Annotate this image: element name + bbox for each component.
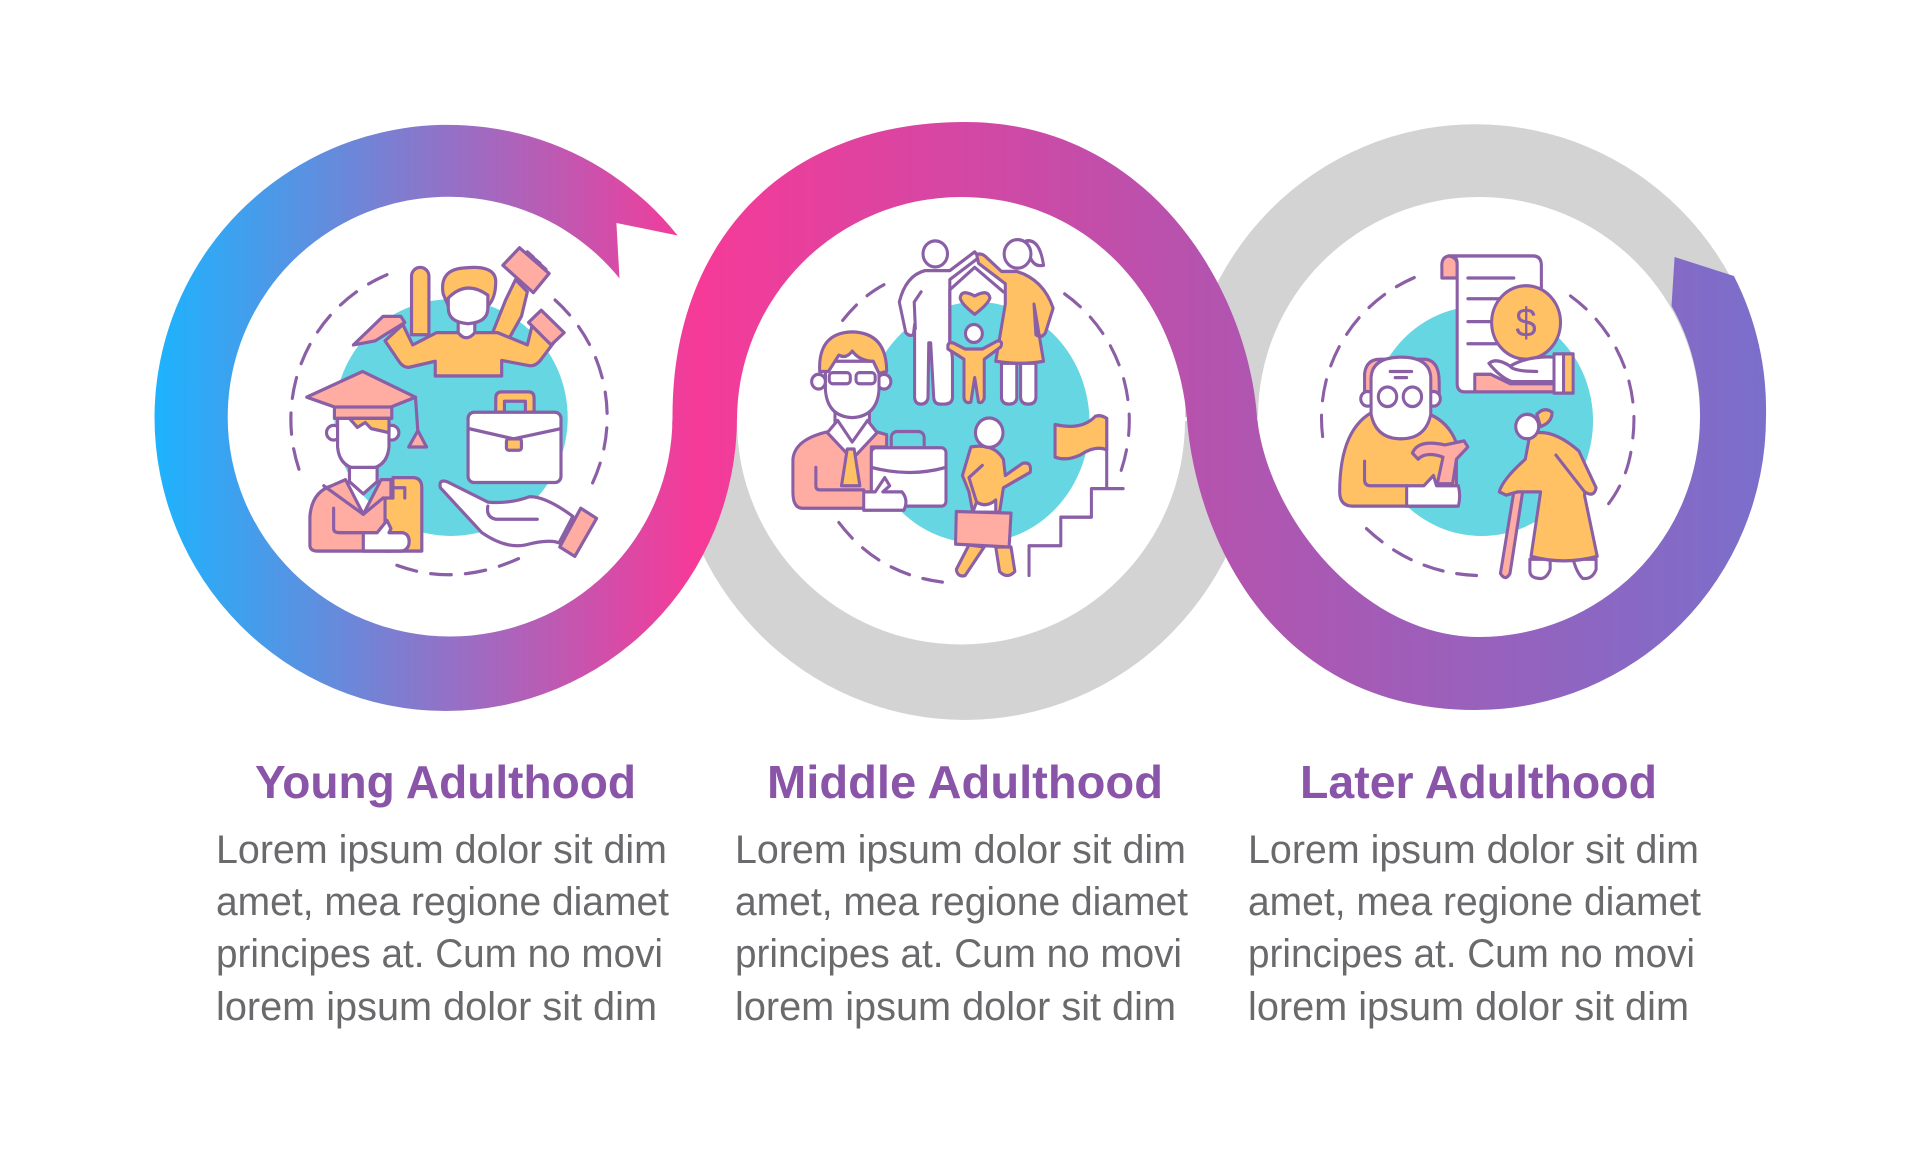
- body copy: Lorem ipsum dolor sit dim: [1248, 828, 1699, 872]
- panel: later adulthood text: [1248, 756, 1701, 1029]
- family: [899, 240, 1053, 404]
- gradient ribbon with arrow ends: [154, 122, 1766, 711]
- open hand: [440, 481, 597, 556]
- elderly woman with walking stick: [1499, 410, 1597, 579]
- bill with coin and hand: [1442, 256, 1573, 393]
- multitasking person: [353, 248, 564, 376]
- body copy: amet, mea regione diamet: [216, 880, 669, 924]
- panel: young adulthood text: [216, 756, 669, 1029]
- grey ring: middle: [672, 421, 1258, 720]
- heading: Middle Adulthood: [767, 756, 1163, 808]
- body copy: lorem ipsum dolor sit dim: [1248, 985, 1689, 1029]
- body copy: amet, mea regione diamet: [735, 880, 1188, 924]
- icon: later adulthood: [1321, 256, 1634, 579]
- icon: middle adulthood: [793, 240, 1129, 582]
- briefcase: [468, 392, 561, 482]
- teal blob: [864, 302, 1089, 543]
- elderly man with cane: [1340, 357, 1468, 506]
- dashed circle: [1321, 278, 1634, 576]
- graduate: [307, 371, 427, 551]
- body copy: lorem ipsum dolor sit dim: [735, 985, 1176, 1029]
- icon: young adulthood: [291, 248, 607, 575]
- body copy: principes at. Cum no movi: [216, 932, 663, 976]
- heading: Young Adulthood: [255, 756, 636, 808]
- heading: Later Adulthood: [1300, 756, 1657, 808]
- body copy: Lorem ipsum dolor sit dim: [735, 828, 1186, 872]
- teal blob: [1370, 306, 1593, 536]
- dashed circle: [839, 284, 1129, 582]
- dashed circle: [291, 275, 607, 575]
- walking person with case: [956, 418, 1030, 576]
- panel: middle adulthood text: [735, 756, 1188, 1029]
- body copy: amet, mea regione diamet: [1248, 880, 1701, 924]
- body copy: principes at. Cum no movi: [735, 932, 1182, 976]
- body copy: Lorem ipsum dolor sit dim: [216, 828, 667, 872]
- teal blob: [334, 299, 568, 536]
- ribbon: three linked rings: [154, 122, 1766, 720]
- body copy: [1248, 828, 1701, 1029]
- body copy: principes at. Cum no movi: [1248, 932, 1695, 976]
- body copy: [216, 828, 669, 1029]
- body copy: [735, 828, 1188, 1029]
- grey ring: right: [1185, 124, 1766, 417]
- businessman with briefcase: [793, 332, 946, 510]
- bill with coin and hand: $: [1515, 301, 1537, 346]
- body copy: lorem ipsum dolor sit dim: [216, 985, 657, 1029]
- stairs and flag: [1029, 416, 1123, 576]
